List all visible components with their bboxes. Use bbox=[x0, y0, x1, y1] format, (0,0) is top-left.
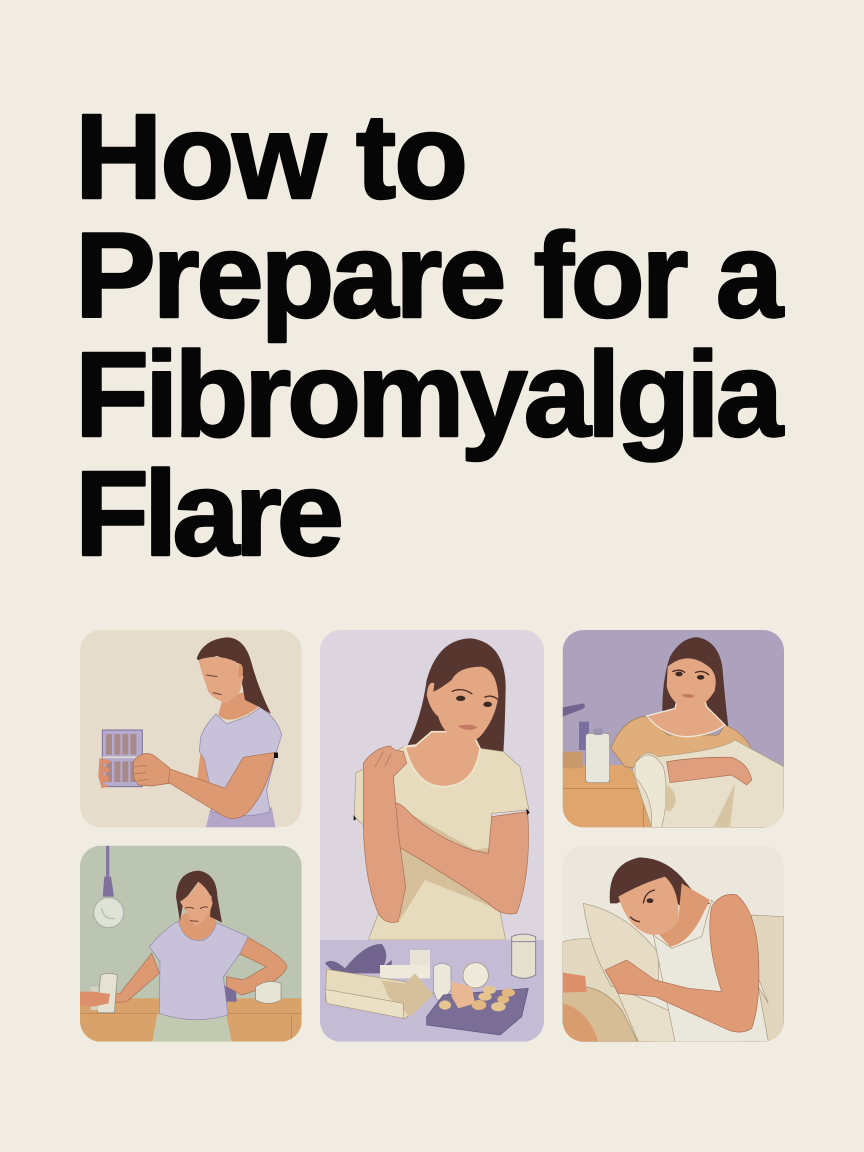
woman figure bbox=[611, 637, 752, 777]
woman figure, side view bbox=[150, 637, 282, 827]
woman figure bbox=[605, 857, 768, 1042]
title bbox=[75, 88, 785, 581]
pot right bbox=[256, 981, 281, 1003]
panel: woman holding sore shoulder above flare kit bbox=[320, 630, 544, 1042]
woman figure, front view bbox=[97, 871, 287, 1042]
icon: supply box with compress bbox=[325, 944, 433, 1018]
panel: woman resting under blanket beside nightstand bbox=[563, 630, 784, 827]
woman figure bbox=[354, 638, 530, 940]
icon: medicine bottle bbox=[433, 963, 451, 1000]
blanket bbox=[632, 740, 784, 827]
nightstand bbox=[563, 765, 654, 827]
nightstand items bbox=[563, 703, 610, 783]
panel: woman holding pill organizer bbox=[80, 630, 302, 827]
icon: hanging light bulb bbox=[94, 846, 124, 928]
icon: glass jar bbox=[512, 934, 536, 978]
table surface bbox=[320, 940, 544, 1042]
counter bbox=[80, 998, 302, 1042]
panel: woman lying on pillow bbox=[563, 846, 784, 1042]
icon: pill blister pack bbox=[102, 730, 142, 787]
title: Flare bbox=[75, 445, 344, 581]
panel: woman at counter with lamp bbox=[80, 846, 302, 1042]
title: Fibromyalgia bbox=[75, 326, 785, 462]
pillow bbox=[583, 903, 658, 987]
title: How to bbox=[75, 88, 468, 224]
bed and cushions bbox=[563, 915, 784, 1042]
title: Prepare for a bbox=[75, 207, 785, 343]
jar left bbox=[80, 973, 117, 1013]
hands gripping pack bbox=[98, 753, 170, 788]
icon: tray with snacks bbox=[427, 963, 528, 1035]
